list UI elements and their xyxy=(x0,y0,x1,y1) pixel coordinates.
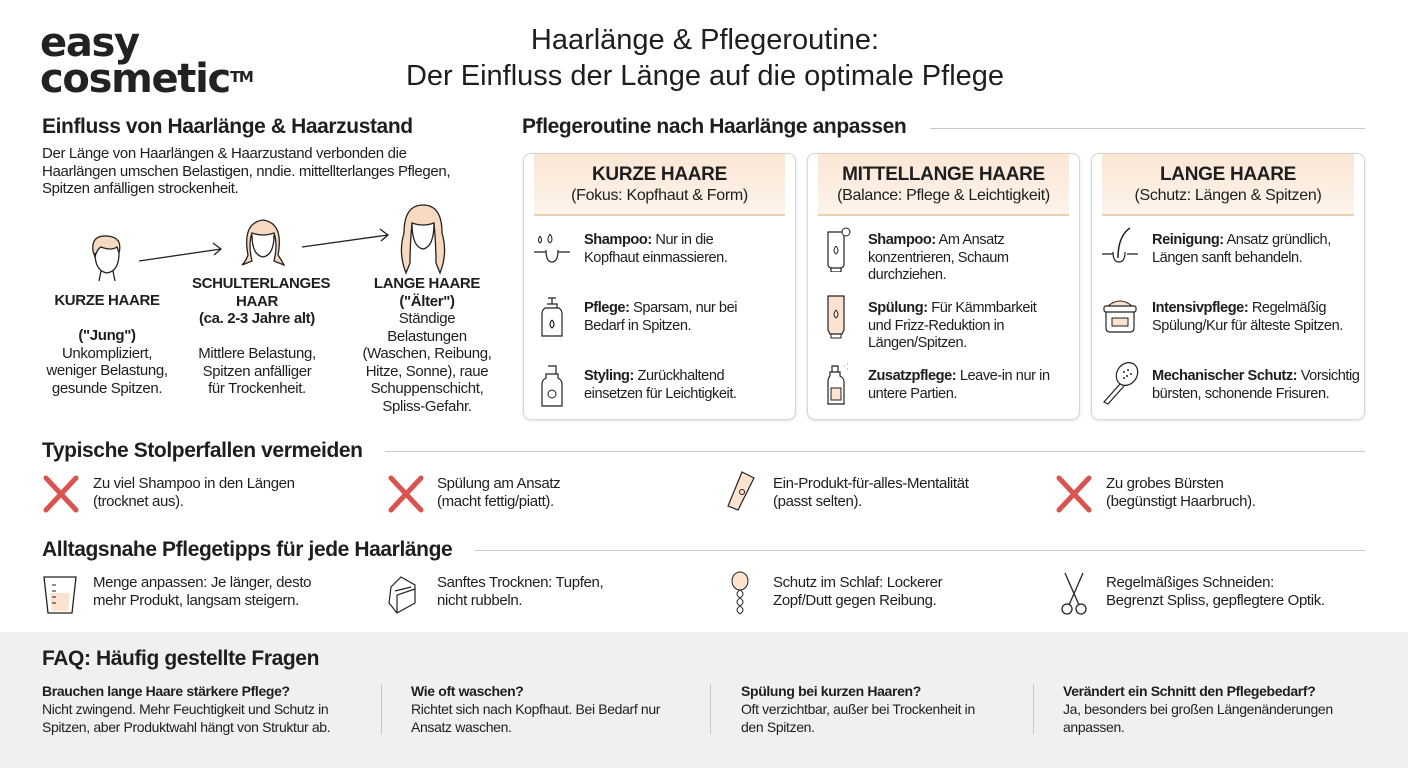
icon: scalp xyxy=(534,234,570,263)
faq 2: Ansatz waschen. xyxy=(411,719,512,735)
label: long: LANGE HAARE xyxy=(374,275,480,292)
intro text xyxy=(42,145,450,197)
tips items: Menge anpassen: Je länger, desto xyxy=(93,574,311,591)
logo xyxy=(40,20,253,102)
pitfall items: (macht fettig/piatt). xyxy=(437,492,554,510)
faq 1: Nicht zwingend. Mehr Feuchtigkeit und Schutz in xyxy=(42,701,328,717)
card: medium: konzentrieren, Schaum xyxy=(868,250,1009,266)
card: long: Intensivpflege: Regelmäßig xyxy=(1152,300,1326,316)
label: short: Unkompliziert, xyxy=(62,344,152,362)
faq 3: den Spitzen. xyxy=(741,719,815,735)
card: long: Spülung/Kur für älteste Spitzen. xyxy=(1152,318,1343,334)
card: short: Kopfhaut einmassieren. xyxy=(584,250,727,266)
icon: scissors xyxy=(1061,572,1087,615)
card: long: LANGE HAARE xyxy=(1160,164,1296,185)
pitfall items: Zu grobes Bürsten xyxy=(1106,475,1223,492)
tips items: nicht rubbeln. xyxy=(437,592,522,608)
card: medium: und Frizz-Reduktion in xyxy=(868,318,1004,334)
heading: Einfluss von Haarlänge & Haarzustand xyxy=(42,115,413,138)
faq 1 xyxy=(42,683,330,735)
label: long xyxy=(362,275,492,414)
tips items: Schutz im Schlaf: Lockerer xyxy=(773,574,942,591)
faq 2 xyxy=(411,683,660,735)
card: short: Pflege: Sparsam, nur bei xyxy=(584,300,737,316)
FAQ heading: FAQ: Häufig gestellte Fragen xyxy=(42,647,319,670)
faq 2: Richtet sich nach Kopfhaut. Bei Bedarf nur xyxy=(411,701,660,717)
intro text: Der Länge von Haarlängen & Haarzustand verbonden die xyxy=(42,145,407,162)
icon: spray xyxy=(827,364,848,405)
label: shoulder: HAAR xyxy=(236,292,278,310)
intro text: Haarlängen umschen Belastigen, nndie. mittellterlanges Pflegen, xyxy=(42,162,450,180)
logo: cosmeticTM xyxy=(40,56,253,102)
card: medium: Zusatzpflege: Leave-in nur in xyxy=(868,368,1050,384)
arrow xyxy=(138,242,222,262)
card: short: Bedarf in Spitzen. xyxy=(584,318,691,334)
card: long xyxy=(1091,153,1365,420)
label: shoulder: Mittlere Belastung, xyxy=(198,345,316,362)
icon: hair strand xyxy=(1102,227,1138,263)
pitfall items: (begünstigt Haarbruch). xyxy=(1106,492,1256,510)
label: long: Ständige xyxy=(399,310,455,327)
faq 1: Brauchen lange Haare stärkere Pflege? xyxy=(42,683,290,699)
label: long: (Waschen, Reibung, xyxy=(362,345,492,362)
tips items: mehr Produkt, langsam steigern. xyxy=(93,592,299,608)
label: short: ("Jung") xyxy=(78,327,136,344)
card: long: (Schutz: Längen & Spitzen) xyxy=(1134,187,1321,204)
label: short: gesunde Spitzen. xyxy=(52,380,162,396)
card: medium: untere Partien. xyxy=(868,386,957,402)
icon: cross xyxy=(44,476,78,512)
faq 4: Verändert ein Schnitt den Pflegebedarf? xyxy=(1063,683,1315,699)
label: shoulder xyxy=(192,275,330,397)
tips items: Zopf/Dutt gegen Reibung. xyxy=(773,592,936,608)
icon: cross xyxy=(1056,476,1092,512)
icon: long hair head xyxy=(400,204,446,275)
label: short: KURZE HAARE xyxy=(54,292,160,309)
icon: shoulder hair head xyxy=(242,219,286,266)
label: long: Belastungen xyxy=(387,328,467,344)
tips items xyxy=(43,572,1325,615)
label: long: Hitze, Sonne), raue xyxy=(366,362,488,380)
card: medium: MITTELLANGE HAARE xyxy=(842,164,1045,185)
label: shoulder: (ca. 2-3 Jahre alt) xyxy=(199,310,315,327)
icon: cross xyxy=(388,476,424,512)
label: shoulder: Spitzen anfälliger xyxy=(203,362,311,380)
title: Haarlänge & Pflegeroutine: xyxy=(531,24,879,56)
faq 3: Oft verzichtbar, außer bei Trockenheit in xyxy=(741,701,975,717)
card: medium: (Balance: Pflege & Leichtigkeit) xyxy=(837,187,1050,204)
pitfall items xyxy=(44,471,1256,512)
icon: tube xyxy=(727,471,755,511)
icon: jar xyxy=(1103,300,1137,333)
card: long: Reinigung: Ansatz gründlich, xyxy=(1152,232,1331,248)
faq 3 xyxy=(741,683,975,735)
intro text: Spitzen anfälligen strockenheit. xyxy=(42,180,238,197)
label: long: Spliss-Gefahr. xyxy=(382,398,472,414)
title xyxy=(406,24,1004,92)
faq 3: Spülung bei kurzen Haaren? xyxy=(741,683,921,699)
section: influence xyxy=(42,115,492,414)
pitfall items: (passt selten). xyxy=(773,492,862,510)
faq 4 xyxy=(1063,683,1333,735)
icon: brush xyxy=(1103,362,1138,405)
card: long: Längen sanft behandeln. xyxy=(1152,250,1302,266)
icon: short hair head xyxy=(92,235,120,282)
label: short xyxy=(46,292,168,396)
label: shoulder: für Trockenheit. xyxy=(208,380,306,397)
pitfall items: (trocknet aus). xyxy=(93,492,184,510)
tips items: Sanftes Trocknen: Tupfen, xyxy=(437,574,603,591)
faq 4: Ja, besonders bei großen Längenänderungen xyxy=(1063,701,1333,717)
tips items: Regelmäßiges Schneiden: xyxy=(1106,574,1274,591)
heading: tips: Alltagsnahe Pflegetipps für jede Haarlänge xyxy=(42,538,452,561)
card: short xyxy=(523,153,796,420)
icon: towel xyxy=(388,576,416,614)
card: medium: durchziehen. xyxy=(868,267,946,283)
pitfall items: Ein-Produkt-für-alles-Mentalität xyxy=(773,475,969,492)
card: medium: Spülung: Für Kämmbarkeit xyxy=(868,300,1036,316)
card: medium xyxy=(807,153,1080,420)
faq 2: Wie oft waschen? xyxy=(411,683,524,699)
pitfall items: Zu viel Shampoo in den Längen xyxy=(93,475,295,492)
card: short: (Fokus: Kopfhaut & Form) xyxy=(571,187,748,204)
card: long: Mechanischer Schutz: Vorsichtig xyxy=(1152,368,1359,384)
icon: tube foam xyxy=(827,228,850,272)
label: long: ("Älter") xyxy=(399,292,455,310)
faq 4: anpassen. xyxy=(1063,719,1124,735)
icon: conditioner tube xyxy=(827,295,845,338)
card: short: Shampoo: Nur in die xyxy=(584,232,713,248)
faq 1: Spitzen, aber Produktwahl hängt von Struktur ab. xyxy=(42,719,330,735)
heading: pitfalls: Typische Stolperfallen vermeiden xyxy=(42,439,363,462)
label: shoulder: SCHULTERLANGES xyxy=(192,275,330,292)
logo: easy xyxy=(40,20,139,66)
pitfall items: Spülung am Ansatz xyxy=(437,475,560,492)
label: short: weniger Belastung, xyxy=(46,362,168,379)
panel: FAQ xyxy=(0,632,1408,768)
heading: routine: Pflegeroutine nach Haarlänge anpassen xyxy=(522,115,906,138)
card: medium: Shampoo: Am Ansatz xyxy=(868,232,1004,248)
card: long: bürsten, schonende Frisuren. xyxy=(1152,386,1329,402)
icon: pump bottle xyxy=(541,297,563,337)
title: Der Einfluss der Länge auf die optimale Pflege xyxy=(406,60,1004,92)
card: short: einsetzen für Leichtigkeit. xyxy=(584,386,737,402)
label: long: Schuppenschicht, xyxy=(371,380,483,397)
card: medium: Längen/Spitzen. xyxy=(868,335,967,351)
icon: styling bottle xyxy=(541,365,563,407)
card: short: KURZE HAARE xyxy=(592,164,727,185)
card: short: Styling: Zurückhaltend xyxy=(584,368,724,384)
tips items: Begrenzt Spliss, gepflegtere Optik. xyxy=(1106,592,1325,608)
icon: braid xyxy=(732,572,748,614)
icon: measuring cup xyxy=(43,576,77,614)
arrow xyxy=(302,228,389,248)
